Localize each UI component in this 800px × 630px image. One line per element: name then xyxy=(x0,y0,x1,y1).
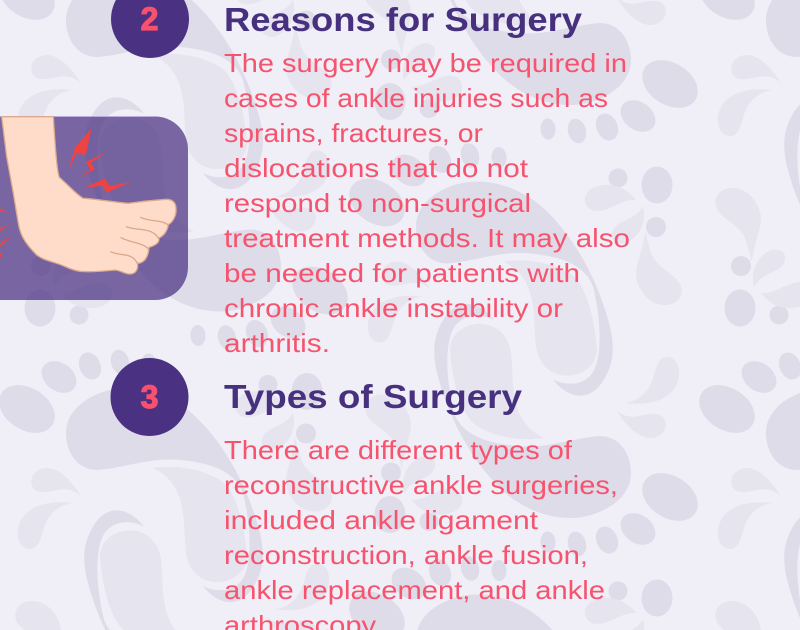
text block: reasons for surgery: cases of ankle injuries such as xyxy=(224,83,608,113)
text block: reasons for surgery: arthritis. xyxy=(224,328,330,358)
text block: reasons for surgery: chronic ankle instability or xyxy=(224,293,563,323)
text block: types of surgery: ankle replacement, and ankle xyxy=(224,575,605,605)
text block: reasons for surgery: be needed for patients with xyxy=(224,258,580,288)
text block: reasons for surgery xyxy=(224,48,630,358)
step 3 badge: 3 xyxy=(141,379,158,415)
text block: reasons for surgery: respond to non-surgical xyxy=(224,188,531,218)
step 2 badge xyxy=(111,0,189,58)
text block: types of surgery: reconstruction, ankle fusion, xyxy=(224,540,588,570)
heading: types of surgery: Types of Surgery xyxy=(224,378,523,415)
text block: reasons for surgery: dislocations that do not xyxy=(224,153,529,183)
step 2 badge: 2 xyxy=(141,1,158,37)
text block: types of surgery: reconstructive ankle surgeries, xyxy=(224,470,618,500)
text block: reasons for surgery: treatment methods. It may also xyxy=(224,223,630,253)
text block: reasons for surgery: sprains, fractures, or xyxy=(224,118,483,148)
text block: types of surgery: There are different types of xyxy=(224,435,573,465)
text block: types of surgery: included ankle ligament xyxy=(224,505,539,535)
panel: injured foot illustration xyxy=(0,116,188,300)
icon: foot xyxy=(2,117,176,274)
heading: reasons for surgery: Reasons for Surgery xyxy=(224,1,583,38)
text block: types of surgery xyxy=(224,435,618,630)
icon: pain bolts xyxy=(0,128,132,257)
step 3 badge xyxy=(110,358,188,436)
text block: reasons for surgery: The surgery may be required in xyxy=(224,48,627,78)
